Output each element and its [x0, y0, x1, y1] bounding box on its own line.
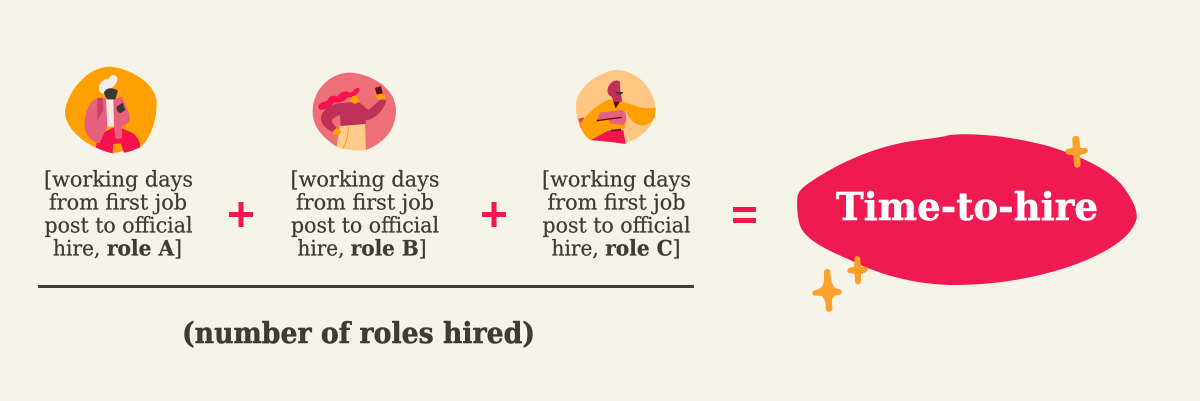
text block: role B: post to official [291, 214, 439, 238]
text block: role C: [working days [542, 168, 691, 192]
text block: role B: from first job [296, 190, 434, 214]
text block: role A: hire, role A] [53, 236, 182, 260]
icon: person B with pink blob [313, 73, 396, 151]
text block: role C [542, 168, 691, 260]
text block: role C: hire, role C] [552, 236, 680, 260]
text block: role B: [working days [290, 168, 440, 192]
text block: role A: post to official [44, 214, 193, 238]
equals sign [733, 207, 756, 223]
text block: role A: from first job [49, 190, 187, 214]
text block: role C: post to official [542, 214, 691, 238]
icon: person C with peach blob [576, 70, 656, 144]
text block: role A: [working days [44, 168, 193, 192]
icon: sparkles [812, 136, 1088, 312]
text block: role B: hire, role B] [298, 236, 426, 260]
plus sign 1 [229, 202, 253, 227]
denominator: (number of roles hired) [182, 316, 535, 350]
text block: role A [44, 168, 193, 260]
text block: role B [290, 168, 440, 260]
icon: person A with orange blob [65, 67, 157, 153]
plus sign 2 [482, 202, 506, 227]
result blob [797, 134, 1137, 285]
text block: role C: from first job [548, 190, 686, 214]
result label: Time-to-hire [836, 184, 1098, 229]
